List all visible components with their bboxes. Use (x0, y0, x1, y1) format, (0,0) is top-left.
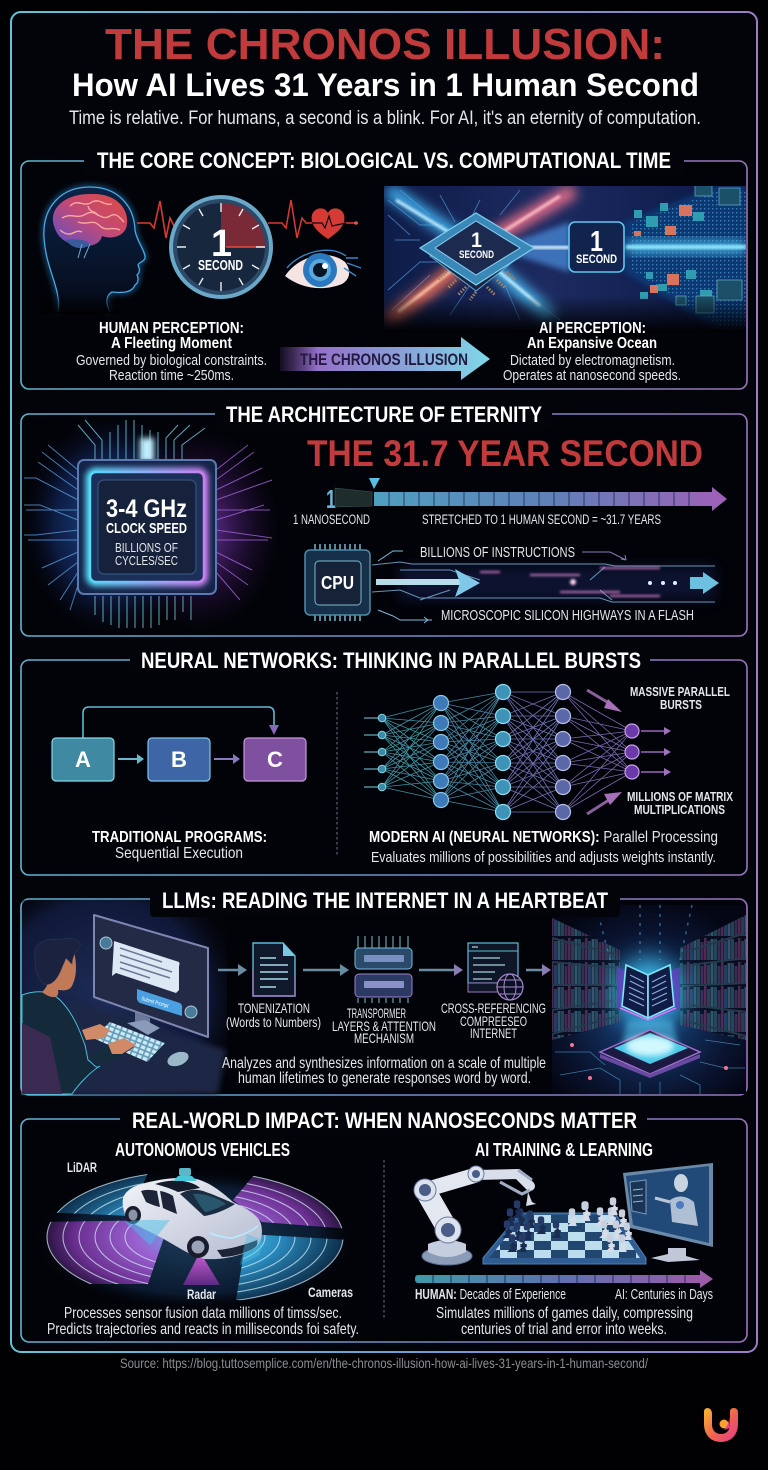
text: AI perception: An Expansive Ocean (527, 335, 657, 352)
icon: ECG and heart (268, 200, 358, 239)
icon: transformer layers (355, 936, 412, 1003)
text: human perception: Governed by biological constraints. (76, 352, 267, 369)
text: LLM description: Analyzes and synthesizes information on a scale of multiple (222, 1055, 546, 1072)
labels: network callouts: MASSIVE PARALLEL (630, 685, 730, 699)
chart: stretched timeline (293, 478, 727, 527)
chart: neural network (364, 684, 671, 820)
arrow: the chronos illusion (280, 337, 490, 380)
subheading: AI training: AI TRAINING & LEARNING (475, 1140, 653, 1160)
text: modern AI (369, 829, 718, 866)
labels: network callouts (627, 685, 734, 817)
text: AI perception: Dictated by electromagnetism. (510, 352, 675, 369)
heading: architecture of eternity: THE ARCHITECTURE OF ETERNITY (226, 402, 542, 427)
labels: pipeline: INTERNET (470, 1025, 517, 1041)
text: modern AI: MODERN AI (NEURAL NETWORKS): Parallel Processing (369, 829, 718, 846)
icon: eye (285, 250, 361, 288)
text: traditional programs: Sequential Execution (115, 845, 243, 862)
diagram: sequential A B C: A (75, 747, 91, 772)
panel: LLMs (21, 888, 747, 1095)
illustration: person at computer (22, 900, 227, 1094)
illustration: book library (552, 905, 746, 1094)
diagram: sequential A B C: B (171, 747, 187, 772)
text: LLM description: human lifetimes to generate responses word by word. (238, 1070, 531, 1087)
chart: stretched timeline: 1 (326, 484, 336, 514)
arrow: the chronos illusion: THE CHRONOS ILLUSION (300, 351, 468, 369)
labels: network callouts: MULTIPLICATIONS (634, 803, 725, 817)
heading: core concept: THE CORE CONCEPT: BIOLOGICAL VS. COMPUTATIONAL TIME (97, 148, 671, 173)
text: autonomous description (47, 1305, 359, 1338)
text: AI perception: AI PERCEPTION: (539, 320, 646, 337)
source line: Source: https://blog.tuttosemplice.com/en/the-chronos-illusion-how-ai-lives-31-years-in-1-human-second/ (120, 1355, 648, 1371)
text: AI perception: Operates at nanosecond speeds. (503, 367, 681, 384)
diagram: CPU silicon highways: MICROSCOPIC SILICON HIGHWAYS IN A FLASH (441, 608, 694, 624)
diagram: CPU silicon highways: CPU (321, 573, 354, 593)
title: How AI Lives 31 Years in 1 Human Second (72, 67, 699, 103)
text: human perception: Reaction time ~250ms. (109, 367, 234, 384)
diagram: CPU silicon highways (305, 544, 719, 624)
icon: ECG line left (137, 201, 174, 238)
panel: neural networks (21, 648, 747, 875)
text: LLM description (222, 1055, 546, 1087)
labels: pipeline: TONENIZATION (238, 1000, 310, 1016)
panel: core concept (21, 148, 747, 389)
text: traditional programs: TRADITIONAL PROGRAMS: (92, 829, 267, 846)
big stat: 31.7 year second: THE 31.7 YEAR SECOND (307, 433, 703, 474)
icon: logo (704, 1408, 738, 1442)
illustration: AI perception: 1 (471, 229, 482, 252)
heading: neural networks: NEURAL NETWORKS: THINKING IN PARALLEL BURSTS (141, 648, 641, 673)
illustration: AI perception: SECOND (459, 249, 494, 261)
text: human perception: HUMAN PERCEPTION: (99, 320, 244, 337)
illustration: AI perception: SECOND (576, 252, 617, 266)
arrows: pipeline (218, 964, 551, 976)
labels: network callouts: BURSTS (660, 698, 702, 712)
text: human perception (76, 320, 267, 384)
labels: pipeline (226, 1000, 546, 1046)
icon: one second clock: SECOND (198, 258, 243, 274)
text: modern AI: Evaluates millions of possibilities and adjusts weights instantly. (371, 850, 716, 866)
icon: one second clock (171, 197, 271, 297)
text: training description: centuries of trial and error into weeks. (461, 1321, 667, 1338)
labels: pipeline: CROSS-REFERENCING (441, 1000, 546, 1016)
diagram: CPU silicon highways: BILLIONS OF INSTRUCTIONS (420, 545, 575, 561)
text: autonomous description: Predicts trajectories and reacts in milliseconds foi safety. (47, 1321, 359, 1338)
illustration: clock speed chip: BILLIONS OF (115, 540, 178, 555)
diagram: sequential A B C: C (267, 747, 283, 772)
labels: sensors: LiDAR (67, 1160, 97, 1175)
illustration: AI perception: 1 (590, 226, 603, 258)
chart: stretched timeline: 1 NANOSECOND (293, 512, 370, 527)
text: AI perception (503, 320, 681, 384)
text: training description: Simulates millions of games daily, compressing (436, 1305, 693, 1322)
text: human perception: A Fleeting Moment (111, 335, 233, 352)
chart: human vs AI timeline: AI: Centuries in Days (615, 1287, 713, 1303)
labels: pipeline: (Words to Numbers) (226, 1014, 321, 1030)
icon: one second clock: 1 (211, 223, 232, 265)
illustration: autonomous car with sensors (46, 1168, 344, 1304)
chart: human vs AI timeline (415, 1270, 713, 1303)
labels: sensors: Cameras (308, 1285, 353, 1300)
illustration: clock speed chip (22, 415, 280, 635)
labels: pipeline: COMPREESEO (460, 1013, 527, 1029)
text: training description (436, 1305, 693, 1338)
title (72, 20, 699, 103)
icon: document (253, 943, 295, 996)
icon: human head with brain (40, 187, 145, 314)
panel: real-world impact (21, 1108, 747, 1342)
labels: sensors: Radar (187, 1287, 217, 1302)
labels: pipeline: TRANSPORMER (347, 1005, 406, 1021)
labels: network callouts: MILLIONS OF MATRIX (627, 790, 734, 804)
chart: human vs AI timeline: HUMAN: Decades of Experience (415, 1287, 566, 1303)
illustration: clock speed chip: CLOCK SPEED (106, 520, 187, 537)
icon: web with globe (468, 943, 523, 1000)
illustration: clock speed chip: 3-4 GHz (106, 495, 187, 523)
text: autonomous description: Processes sensor fusion data millions of timss/sec. (64, 1305, 342, 1322)
illustration: clock speed chip: CYCLES/SEC (115, 553, 178, 568)
diagram: sequential A B C (52, 707, 306, 781)
subheading: autonomous vehicles: AUTONOMOUS VEHICLES (115, 1140, 290, 1160)
chart: stretched timeline: STRETCHED TO 1 HUMAN SECOND = ~31.7 YEARS (422, 512, 661, 527)
heading: real-world impact: REAL-WORLD IMPACT: WHEN NANOSECONDS MATTER (132, 1108, 637, 1133)
illustration: person at computer: Submit Prompt (140, 996, 169, 1010)
panel: architecture of eternity (21, 402, 747, 636)
text: traditional programs (92, 829, 267, 862)
title: THE CHRONOS ILLUSION: (105, 20, 665, 69)
heading: LLMs: LLMs: READING THE INTERNET IN A HEARTBEAT (162, 888, 608, 913)
illustration: robot arm chess (414, 1163, 713, 1265)
labels: sensors (67, 1160, 353, 1302)
illustration: AI perception (384, 181, 746, 332)
labels: pipeline: MECHANISM (354, 1030, 414, 1046)
labels: pipeline: LAYERS & ATTENTION (332, 1018, 436, 1034)
